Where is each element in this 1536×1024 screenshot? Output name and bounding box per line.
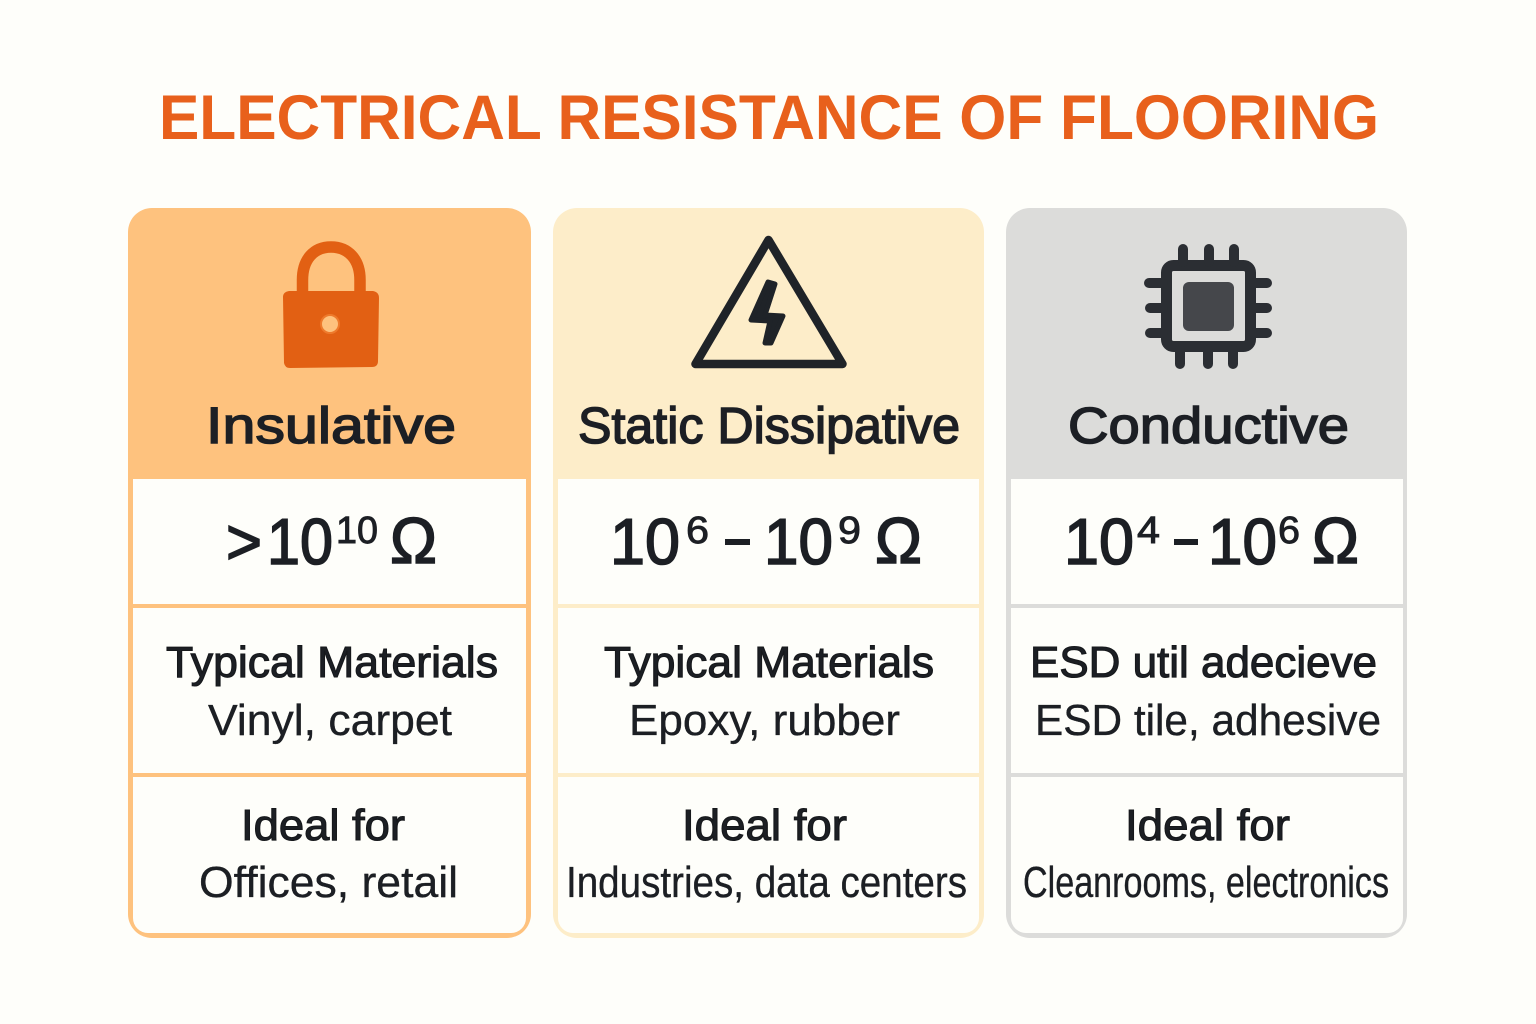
panel: insulative (128, 208, 531, 938)
icon: padlock (283, 247, 379, 368)
resistance value: 10^4 to 10^6 ohm: 10 (1064, 505, 1134, 578)
resistance value: greater than 10^10 ohm: 10 (267, 505, 333, 578)
resistance value: 10^6 to 10^9 ohm: 9 (838, 510, 861, 552)
icon: high voltage warning triangle (696, 240, 842, 364)
panel: conductive (1006, 208, 1407, 938)
text block: ideal for (1023, 801, 1389, 907)
heading: Conductive: Conductive (1068, 397, 1349, 454)
text block: typical materials (604, 638, 934, 745)
text block: ideal for: Ideal for (241, 801, 405, 850)
resistance value: 10^6 to 10^9 ohm (610, 504, 922, 578)
text block: typical materials: Typical Materials (166, 638, 498, 687)
resistance value: 10^6 to 10^9 ohm: 6 (686, 510, 709, 552)
text block: materials: ESD util adecieve (1030, 638, 1377, 687)
resistance value: 10^4 to 10^6 ohm: Ω (1312, 504, 1359, 577)
resistance value: 10^4 to 10^6 ohm: 4 (1137, 510, 1160, 552)
resistance value: 10^6 to 10^9 ohm: 10 (764, 505, 833, 578)
resistance value: 10^4 to 10^6 ohm: 10 (1208, 505, 1277, 578)
heading: Insulative: Insulative (206, 397, 456, 454)
text block: typical materials: Typical Materials (604, 638, 934, 687)
text block: materials (1030, 638, 1381, 745)
text block: ideal for: Industries, data centers (566, 858, 967, 907)
resistance value: greater than 10^10 ohm (226, 504, 437, 578)
text block: ideal for: Offices, retail (199, 858, 458, 907)
text block: materials: ESD tile, adhesive (1035, 696, 1381, 745)
text block: ideal for (199, 801, 458, 907)
text block: ideal for: Ideal for (682, 801, 847, 850)
resistance value: greater than 10^10 ohm: Ω (390, 504, 437, 577)
panel: static dissipative (553, 208, 984, 938)
text block: ideal for: Ideal for (1125, 801, 1290, 850)
text block: ideal for (566, 801, 967, 907)
resistance value: 10^6 to 10^9 ohm: 10 (610, 505, 680, 578)
resistance value: 10^4 to 10^6 ohm: 6 (1278, 510, 1300, 552)
resistance value: greater than 10^10 ohm: 10 (336, 510, 378, 552)
title: ELECTRICAL RESISTANCE OF FLOORING (159, 83, 1379, 153)
icon: microchip (1149, 249, 1267, 364)
resistance value: 10^6 to 10^9 ohm: Ω (875, 504, 922, 577)
text block: ideal for: Cleanrooms, electronics (1023, 858, 1389, 907)
heading: Static Dissipative: Static Dissipative (578, 397, 960, 454)
text block: typical materials: Epoxy, rubber (629, 696, 900, 745)
text block: typical materials (166, 638, 498, 745)
text block: typical materials: Vinyl, carpet (208, 696, 452, 745)
resistance value: greater than 10^10 ohm: > (226, 505, 262, 578)
resistance value: 10^4 to 10^6 ohm (1064, 504, 1359, 578)
